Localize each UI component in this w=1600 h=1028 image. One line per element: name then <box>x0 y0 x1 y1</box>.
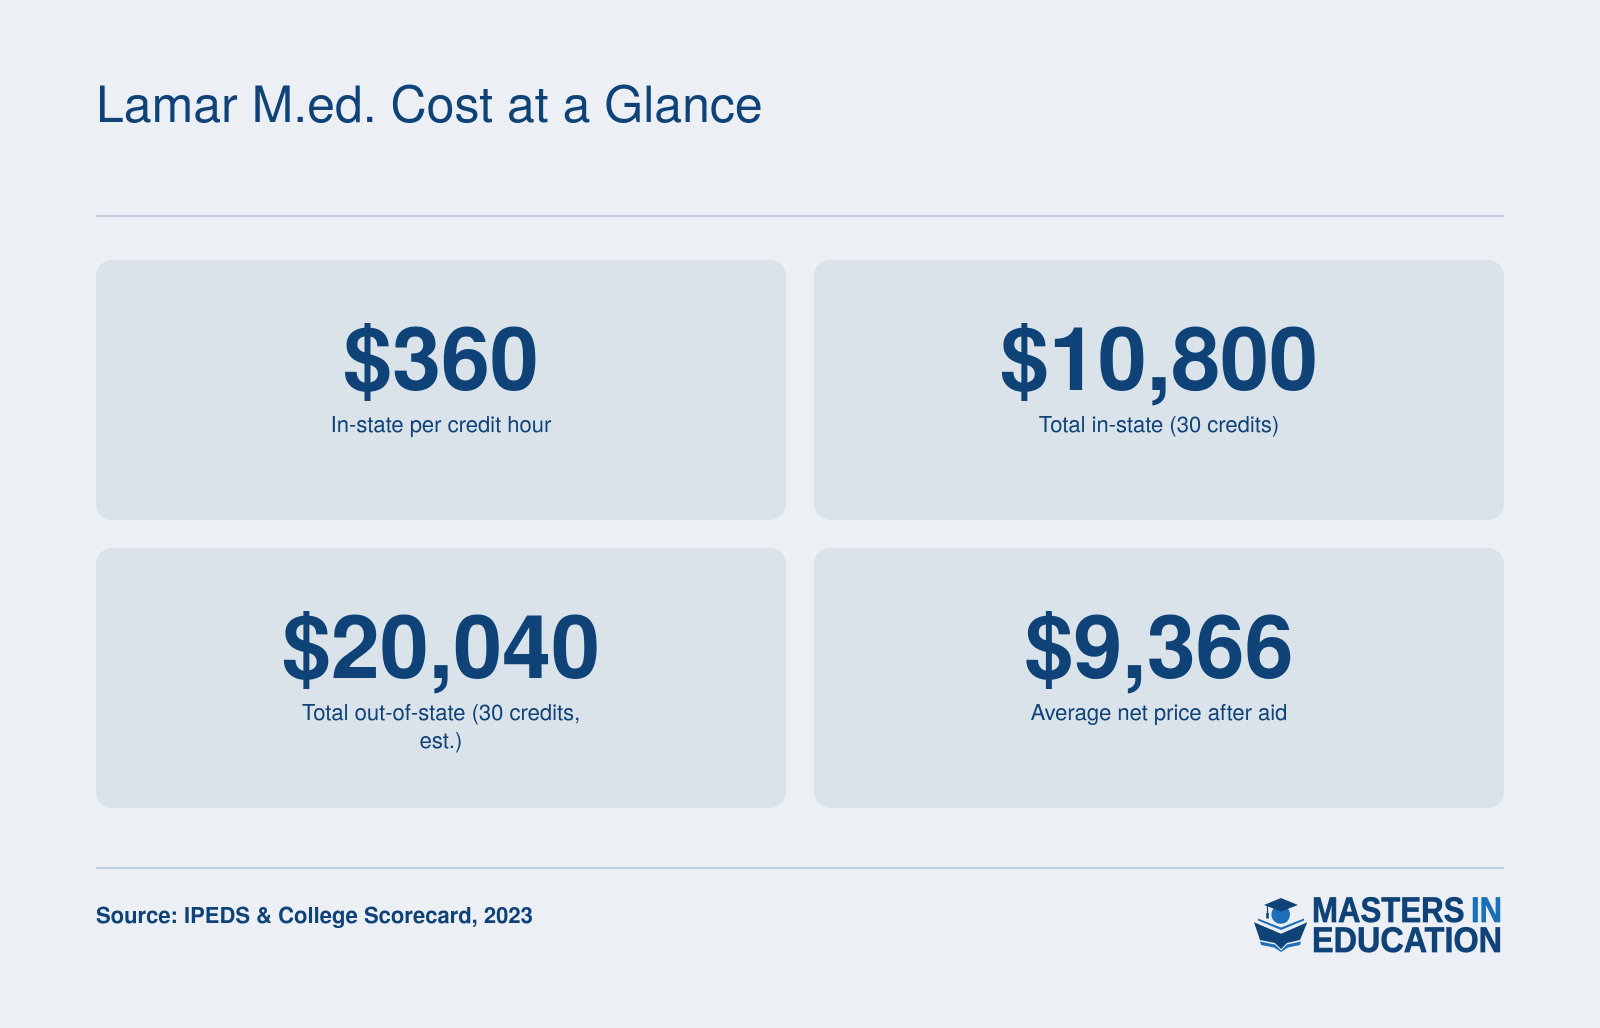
panel: total in-state <box>814 260 1504 520</box>
stat label: Average net price after aid <box>1031 696 1287 727</box>
stat label: Total in-state (30 credits) <box>1039 408 1279 439</box>
logo: Masters in Education <box>1254 891 1502 960</box>
panel: in-state per credit hour <box>96 260 786 520</box>
stat label: In-state per credit hour <box>331 408 551 439</box>
panel: total out-of-state <box>96 548 786 808</box>
icon: graduation cap over open book <box>1254 898 1307 952</box>
stat value: $10,800 <box>1000 292 1318 418</box>
stat value: $20,040 <box>282 580 600 706</box>
wordmark: IN <box>1471 891 1502 930</box>
stat label: Total out-of-state (30 credits, est.) <box>302 696 580 755</box>
source note: Source: IPEDS & College Scorecard, 2023 <box>96 898 533 930</box>
wordmark <box>1312 891 1502 960</box>
stat value: $9,366 <box>1024 580 1294 706</box>
wordmark: MASTERS <box>1312 891 1464 930</box>
title: Lamar M.ed. Cost at a Glance <box>96 66 763 137</box>
panel: average net price <box>814 548 1504 808</box>
stat value: $360 <box>343 292 539 418</box>
